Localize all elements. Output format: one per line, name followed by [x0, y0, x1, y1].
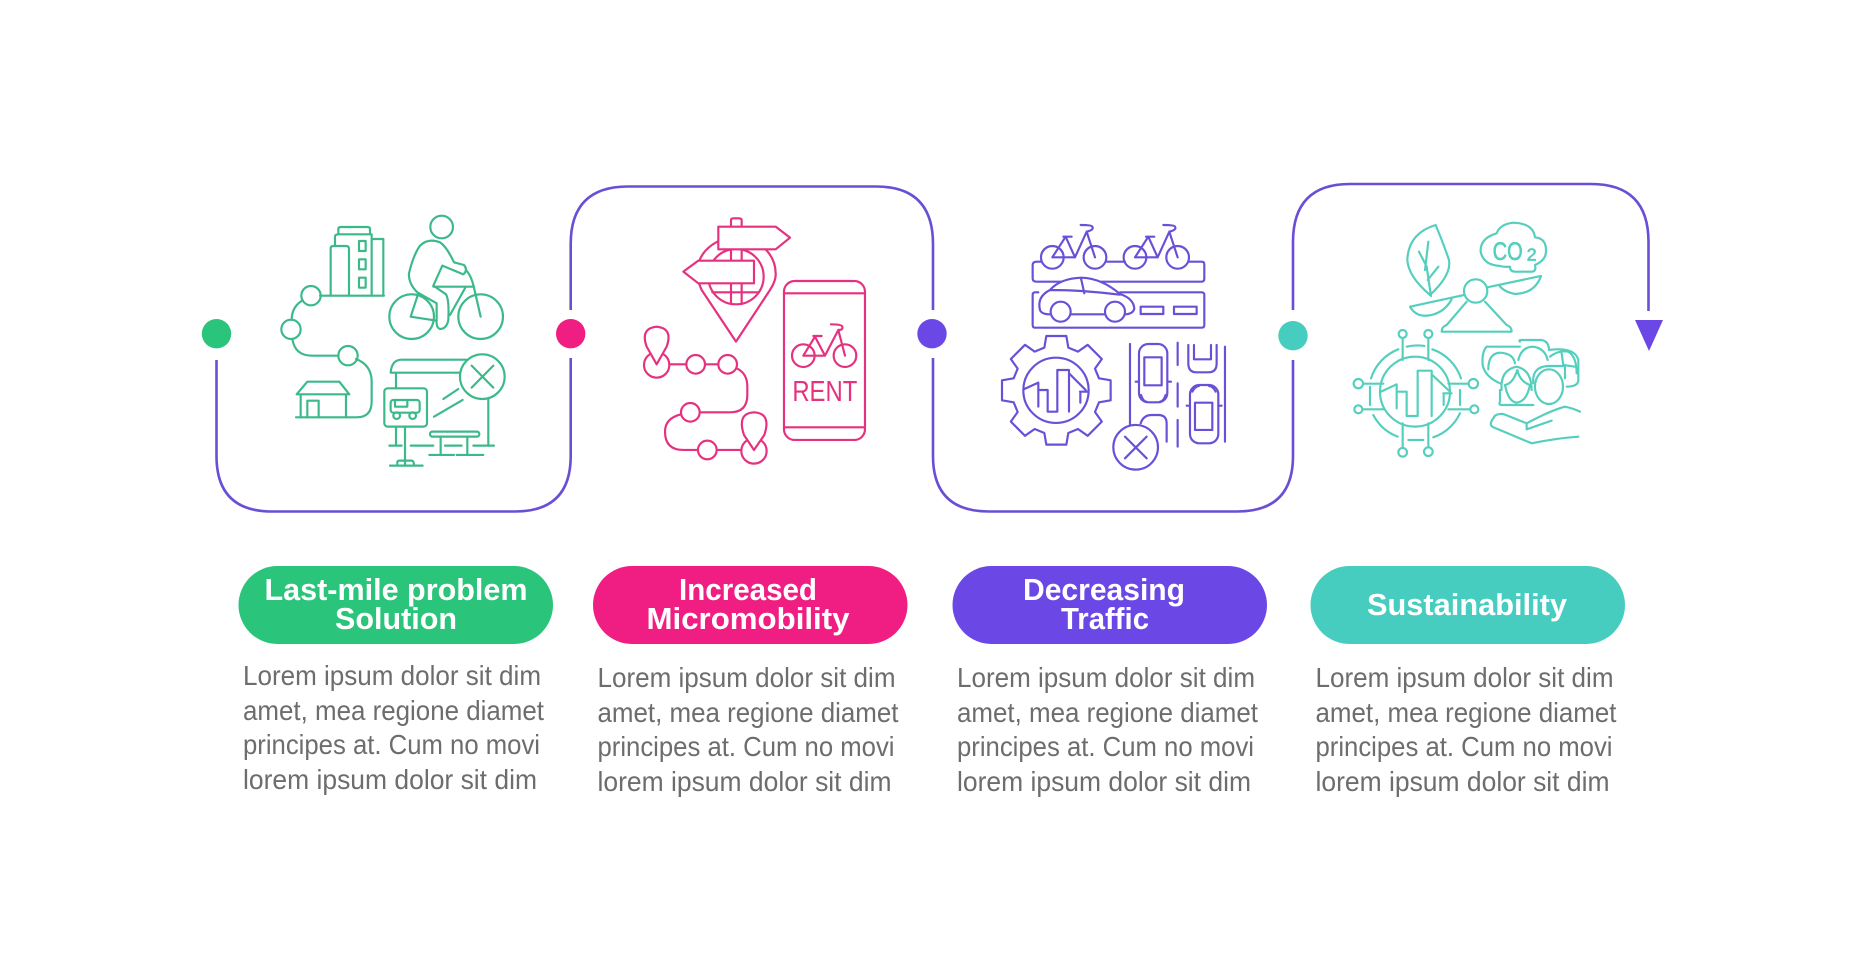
body text: principes at. Cum no movi	[598, 731, 894, 762]
body text: principes at. Cum no movi	[957, 731, 1254, 762]
pill heading: Last-mile problem	[264, 572, 528, 607]
pill heading: Increased	[679, 572, 817, 607]
body text	[598, 662, 899, 797]
body text: Lorem ipsum dolor sit dim	[243, 660, 541, 691]
body text: amet, mea regione diamet	[243, 695, 544, 726]
icon: last-mile cyclist, city and bus stop	[281, 216, 505, 466]
pill heading: Micromobility	[646, 601, 850, 636]
body text	[243, 660, 544, 795]
icon: sustainability, leaf, CO2 scale, chip and people: CO	[1493, 238, 1523, 266]
pill heading	[1310, 566, 1625, 644]
pill heading: Solution	[335, 601, 457, 636]
icon: rental bike phone, signpost pin and route: RENT	[792, 376, 857, 408]
arrow head	[1635, 320, 1663, 351]
pill heading: Traffic	[1061, 601, 1149, 636]
step dot: pink	[556, 319, 585, 348]
body text: lorem ipsum dolor sit dim	[1316, 766, 1610, 797]
icon: traffic, bikes, car and gear	[1002, 225, 1225, 470]
body text: Lorem ipsum dolor sit dim	[957, 662, 1255, 693]
body text: Lorem ipsum dolor sit dim	[1316, 662, 1614, 693]
body text: lorem ipsum dolor sit dim	[957, 766, 1251, 797]
step 4: sustainability	[1310, 566, 1625, 797]
pill heading	[238, 566, 553, 644]
body text: amet, mea regione diamet	[957, 697, 1258, 728]
icon: sustainability, leaf, CO2 scale, chip and people	[1354, 223, 1580, 457]
body text	[957, 662, 1258, 797]
pill heading	[952, 566, 1267, 644]
body text: Lorem ipsum dolor sit dim	[598, 662, 896, 693]
body text: amet, mea regione diamet	[1316, 697, 1617, 728]
pill heading	[593, 566, 908, 644]
body text: lorem ipsum dolor sit dim	[598, 766, 892, 797]
timeline connector	[216, 184, 1648, 512]
body text	[1316, 662, 1617, 797]
step 3: decreasing traffic	[952, 566, 1267, 797]
icon: rental bike phone, signpost pin and route	[644, 218, 865, 464]
step dot: green	[202, 319, 231, 348]
pill heading: Decreasing	[1023, 572, 1185, 607]
icon: sustainability, leaf, CO2 scale, chip and people: 2	[1527, 244, 1537, 264]
body text: lorem ipsum dolor sit dim	[243, 764, 537, 795]
pill heading: Sustainability	[1367, 587, 1568, 622]
body text: principes at. Cum no movi	[243, 729, 540, 760]
body text: principes at. Cum no movi	[1316, 731, 1612, 762]
body text: amet, mea regione diamet	[598, 697, 899, 728]
step dot: purple	[917, 319, 947, 348]
step 2: increased micromobility	[593, 566, 908, 797]
step dot: teal	[1278, 321, 1308, 350]
step 1: last-mile problem solution	[238, 566, 553, 795]
